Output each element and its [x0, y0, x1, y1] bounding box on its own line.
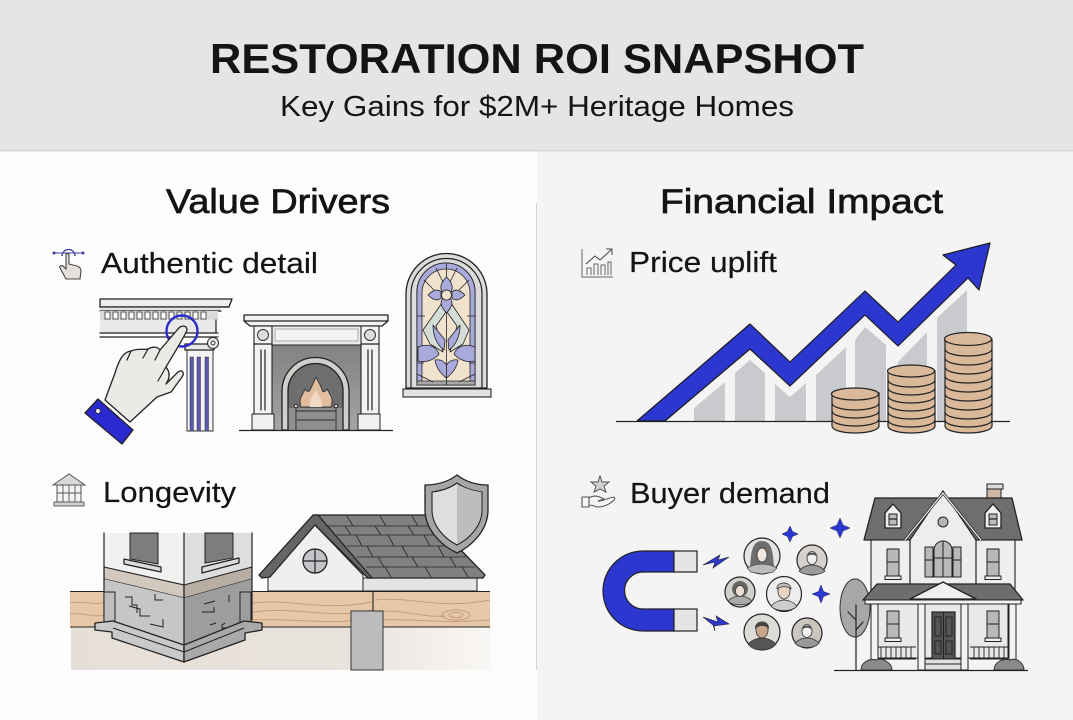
illustration: stained glass window	[403, 254, 491, 397]
label: longevity: Longevity	[103, 477, 237, 509]
avatar: woman long hair	[744, 538, 780, 574]
avatar: woman curly hair	[725, 577, 755, 607]
title: RESTORATION ROI SNAPSHOT	[210, 35, 864, 82]
panel: financial impact	[582, 183, 1028, 670]
illustration: house roof with shield	[259, 475, 488, 591]
icon: growth chart	[582, 249, 613, 277]
baseline	[616, 420, 1010, 422]
coin stack small	[832, 388, 879, 433]
arrow: rising price	[637, 243, 990, 421]
avatar: man top right	[797, 545, 827, 575]
heading: financial impact: Financial Impact	[660, 183, 944, 221]
panel: value drivers	[52, 183, 491, 670]
illustration: timber and ground	[70, 591, 491, 670]
icon: star in hand	[582, 476, 615, 507]
icon: heritage building	[53, 474, 85, 506]
coin stack medium	[888, 365, 935, 433]
chart: bars behind arrow	[694, 290, 967, 421]
heading: value drivers: Value Drivers	[166, 183, 390, 221]
tree	[840, 579, 870, 670]
illustration: fireplace	[239, 315, 393, 430]
icon: magnet	[603, 551, 697, 631]
porch rails	[878, 647, 1008, 659]
subtitle: Key Gains for $2M+ Heritage Homes	[280, 91, 794, 123]
illustration: house corner with foundation	[95, 533, 262, 662]
avatar: man bottom right	[792, 618, 822, 648]
illustration: column and cornice	[100, 299, 232, 431]
buyer avatars	[725, 538, 827, 650]
label: price uplift: Price uplift	[629, 247, 777, 279]
columns	[871, 604, 1016, 670]
coin stacks	[832, 332, 992, 433]
icon: pointing hand	[85, 316, 198, 444]
label: buyer demand: Buyer demand	[630, 478, 830, 510]
coin stack tall	[944, 332, 992, 433]
avatar: man dark hair	[744, 614, 780, 650]
sparkles	[782, 518, 850, 603]
door	[932, 612, 955, 659]
illustration: heritage house	[834, 484, 1028, 670]
bushes	[861, 659, 1024, 670]
header band	[0, 0, 1073, 152]
icon: attraction bolts	[703, 555, 729, 631]
porch roof	[863, 582, 1023, 658]
icon: touch gesture	[52, 250, 84, 279]
steps	[925, 659, 961, 670]
upper windows	[885, 541, 1001, 580]
label: authentic detail: Authentic detail	[101, 248, 318, 280]
avatar: man with glasses centre	[766, 576, 802, 612]
lower windows	[885, 611, 1001, 642]
dormers	[885, 504, 1001, 528]
